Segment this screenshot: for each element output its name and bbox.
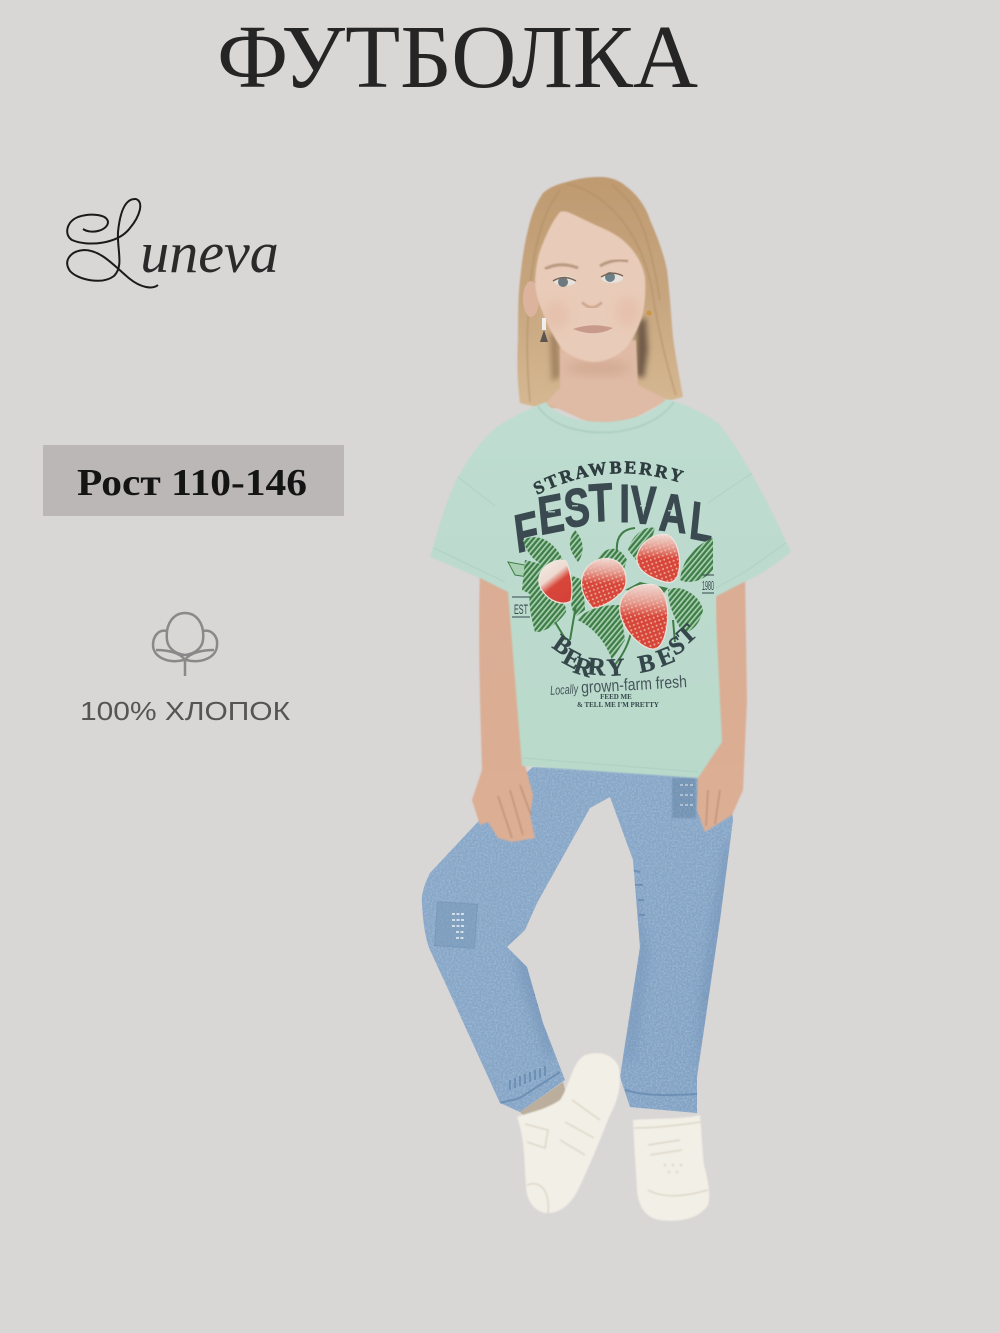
print: tagline: Locally <box>550 681 580 698</box>
left shoe <box>517 1053 620 1213</box>
print: year tag <box>702 575 714 593</box>
print: est tag: EST <box>514 601 528 617</box>
neck <box>546 340 668 432</box>
hair strands <box>527 184 676 402</box>
t-shirt <box>430 399 791 778</box>
photo: girl in t-shirt <box>422 176 791 1221</box>
print: est tag <box>512 597 530 617</box>
print: tagline: grown-farm fresh <box>580 672 687 697</box>
left sock <box>520 1082 568 1122</box>
shirt print: 1980 <box>702 578 714 593</box>
print: leaves <box>508 527 713 667</box>
knee patch <box>435 902 477 948</box>
print: festival heading: FESTIVAL <box>511 471 717 564</box>
right arm and hand <box>697 575 747 832</box>
collar <box>538 402 674 432</box>
denim shading <box>500 840 734 1103</box>
jeans <box>422 767 733 1113</box>
cheeks <box>544 298 639 329</box>
hair back <box>517 177 683 408</box>
icon: cotton boll <box>153 613 217 676</box>
print: strawberries <box>539 534 680 649</box>
print: small lines: FEED ME <box>600 693 632 701</box>
size badge <box>43 445 344 516</box>
nose and mouth <box>573 302 613 333</box>
left ear <box>523 281 539 317</box>
print: small lines: & TELL ME I'M PRETTY <box>577 701 659 709</box>
earrings <box>540 310 652 342</box>
size badge: Рост 110-146 <box>77 462 307 504</box>
chin shadow <box>566 361 630 375</box>
eyes and brows <box>545 260 628 287</box>
title: ФУТБОЛКА <box>217 8 698 107</box>
face <box>535 211 645 362</box>
left arm and hand <box>472 570 535 842</box>
brand logo <box>67 199 279 287</box>
print: distress marks <box>548 505 674 512</box>
right shoe <box>633 1115 709 1221</box>
print: tagline <box>550 672 687 699</box>
shirt print <box>507 461 717 709</box>
material label: 100% ХЛОПОК <box>80 696 290 726</box>
print: strawberry heading: STRAWBERRY <box>533 461 684 494</box>
print: berry best: BERRY BEST <box>548 619 703 684</box>
shadow hair right <box>636 318 648 378</box>
shadow hair left <box>550 332 560 382</box>
seams <box>434 473 786 772</box>
hip patch <box>672 778 696 818</box>
